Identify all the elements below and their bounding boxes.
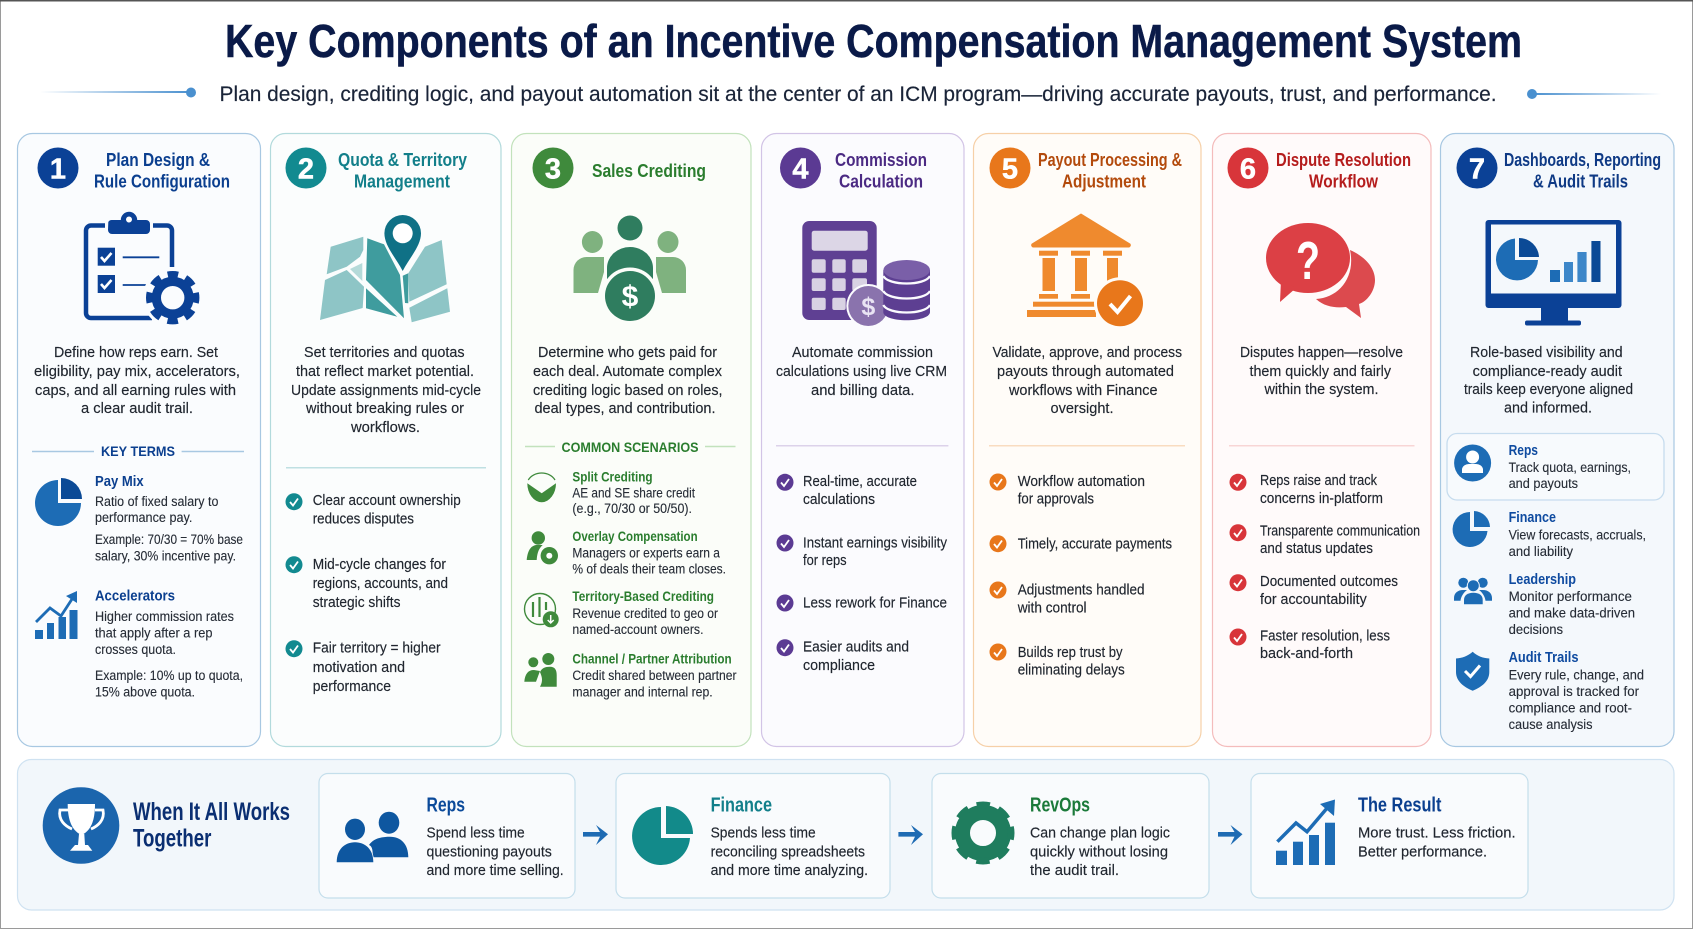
card: revops: the audit trail.: [1030, 862, 1119, 879]
icon: clipboard with gear: [86, 212, 203, 328]
key terms heading: KEY TERMS: [101, 443, 175, 459]
card: finance: and more time analyzing.: [711, 862, 868, 879]
description: Validate, approve, and process: [992, 344, 1182, 361]
description: workflows with Finance: [1008, 382, 1158, 399]
check bullet: [286, 493, 302, 510]
check bullet: [776, 594, 794, 612]
heading: [94, 150, 230, 192]
benefits list: [1230, 472, 1420, 662]
description: [1240, 344, 1403, 398]
icon: calculator with coin and database: [802, 221, 930, 328]
audience: audit trails: Every rule, change, and: [1509, 668, 1644, 683]
audience: audit trails: approval is tracked for: [1509, 684, 1639, 699]
scenario: territory-based crediting: Revenue credited to geo or: [572, 606, 718, 621]
description: within the system.: [1264, 381, 1378, 398]
scenario: channel partner attribution: Credit shared between partner: [572, 668, 737, 683]
card: revops: quickly without losing: [1030, 844, 1168, 861]
scenario: split crediting: Split Crediting: [572, 469, 653, 485]
audience: finance: [1509, 509, 1646, 559]
check bullet: [990, 644, 1006, 660]
scenario: overlay compensation: [572, 528, 726, 577]
common scenarios heading: COMMON SCENARIOS: [562, 439, 698, 455]
benefits list: Builds rep trust by: [1018, 644, 1123, 661]
audience: reps box: and payouts: [1509, 476, 1578, 491]
description: a clear audit trail.: [81, 400, 193, 417]
description: [776, 344, 947, 399]
scenario: channel partner attribution: manager and internal rep.: [572, 685, 713, 700]
panel: dispute resolution: [1212, 134, 1431, 746]
description: and informed.: [1504, 400, 1592, 417]
description: that reflect market potential.: [296, 363, 474, 380]
benefits list: [776, 473, 947, 674]
description: compliance-ready audit: [1473, 363, 1623, 380]
panel: when it all works together: [18, 760, 1674, 910]
number badge 6: 6: [1240, 154, 1256, 186]
scenario: territory-based crediting: named-account owners.: [572, 622, 704, 637]
description: without breaking rules or: [305, 400, 464, 417]
audience: leadership: and make data-driven: [1509, 606, 1635, 621]
description: Set territories and quotas: [304, 344, 464, 361]
scenario: split crediting: (e.g., 70/30 or 50/50).: [572, 501, 692, 516]
benefits list: Faster resolution, less: [1260, 628, 1390, 645]
icon: map with pin: [320, 215, 450, 322]
check bullet: [286, 640, 302, 657]
description: [291, 344, 481, 436]
term: accelerators: [95, 588, 243, 700]
audience: leadership: Leadership: [1509, 571, 1576, 588]
benefits list: Easier audits and: [803, 639, 909, 656]
term: pay mix: Pay Mix: [95, 473, 144, 490]
audience: audit trails: [1509, 649, 1644, 732]
description: crediting logic based on roles,: [533, 382, 722, 399]
benefits list: Transparente communication: [1260, 523, 1420, 540]
term: pay mix: performance pay.: [95, 510, 192, 525]
heading: [835, 150, 927, 192]
panel: sales crediting: [512, 134, 751, 746]
benefits list: strategic shifts: [313, 594, 400, 611]
arrow: [898, 825, 923, 845]
benefits list: Reps raise and track: [1260, 472, 1377, 489]
description: Role-based visibility and: [1470, 344, 1623, 361]
benefits list: [990, 473, 1172, 679]
icon: people with dollar coin: [574, 216, 686, 324]
term: accelerators: Example: 10% up to quota,: [95, 668, 243, 683]
card: revops: Can change plan logic: [1030, 825, 1170, 842]
arrow: [1218, 825, 1242, 845]
term: accelerators: crosses quota.: [95, 642, 176, 657]
icon: split crediting: [527, 473, 556, 502]
benefits list: concerns in-platform: [1260, 490, 1383, 507]
heading: Quota & Territory: [338, 150, 467, 170]
icon: overlay compensation: [527, 531, 558, 564]
benefits list: regions, accounts, and: [313, 575, 448, 592]
heading: Rule Configuration: [94, 172, 230, 192]
icon: audit shield: [1456, 652, 1489, 691]
scenario: channel partner attribution: Channel / Partner Attribution: [572, 651, 732, 667]
icon: result chart: [1276, 800, 1335, 865]
benefits list: Fair territory = higher: [313, 640, 441, 657]
audience: audit trails: compliance and root-: [1509, 701, 1632, 716]
audience: finance: View forecasts, accruals,: [1509, 528, 1646, 543]
benefits list: Instant earnings visibility: [803, 535, 947, 552]
heading: Management: [354, 172, 450, 192]
number badge 1: [38, 148, 78, 188]
scenario: territory-based crediting: Territory-Based Crediting: [572, 588, 714, 604]
check bullet: [990, 535, 1006, 552]
description: [992, 344, 1182, 417]
left subtitle accent: [40, 88, 196, 98]
description: calculations using live CRM: [776, 363, 947, 380]
card: the result: Better performance.: [1358, 844, 1487, 861]
icon: trophy: [43, 787, 119, 864]
description: Automate commission: [792, 344, 933, 361]
audience: audit trails: cause analysis: [1509, 717, 1593, 732]
heading: Workflow: [1309, 172, 1379, 192]
check bullet: [1230, 574, 1246, 591]
card: reps: questioning payouts: [426, 844, 552, 861]
number badge 4: [780, 148, 821, 188]
number badge 3: [532, 148, 574, 188]
number badge 6: [1228, 148, 1268, 188]
icon: channel partner attribution: [524, 653, 557, 687]
term: accelerators: 15% above quota.: [95, 685, 195, 700]
audience: leadership: Monitor performance: [1509, 589, 1632, 604]
icon: leadership group: [1454, 578, 1492, 604]
scenario: channel partner attribution: [572, 651, 737, 700]
benefits list: Documented outcomes: [1260, 573, 1398, 590]
description: caps, and all earning rules with: [35, 382, 236, 399]
audience: reps box: Track quota, earnings,: [1509, 460, 1631, 475]
audience: leadership: decisions: [1509, 622, 1563, 637]
card: revops: RevOps: [1030, 795, 1090, 817]
heading: Adjustment: [1062, 172, 1146, 192]
benefits list: for approvals: [1018, 491, 1094, 508]
card: finance: [616, 774, 890, 898]
right subtitle accent: [1527, 89, 1661, 99]
number badge 2: [286, 148, 326, 188]
icon: reps people: [337, 812, 408, 862]
card: finance: Finance: [711, 795, 772, 817]
check bullet: [1230, 628, 1246, 646]
audience: finance: Finance: [1509, 509, 1556, 526]
audience: audit trails: Audit Trails: [1509, 649, 1578, 666]
benefits list: eliminating delays: [1018, 662, 1125, 679]
number badge 3: 3: [545, 154, 561, 186]
icon: finance pie: [1453, 511, 1490, 547]
description: [34, 344, 240, 417]
number badge 4: 4: [792, 154, 809, 186]
benefits list: Less rework for Finance: [803, 595, 947, 612]
number badge 7: 7: [1469, 154, 1485, 186]
description: and billing data.: [811, 382, 914, 399]
heading: [338, 150, 467, 192]
heading: Calculation: [839, 172, 923, 192]
check bullet: [776, 639, 794, 656]
benefits list: performance: [313, 678, 391, 695]
scenario: overlay compensation: Overlay Compensation: [572, 528, 698, 544]
heading: [1504, 150, 1661, 192]
card: reps: Spend less time: [426, 825, 525, 842]
card: reps: Reps: [426, 795, 465, 817]
benefits list: for accountability: [1260, 591, 1367, 608]
heading: Together: [133, 825, 212, 853]
icon: people with dollar coin: $: [622, 280, 639, 314]
heading: Commission: [835, 150, 927, 170]
benefits list: Timely, accurate payments: [1018, 536, 1172, 553]
term: pay mix: Example: 70/30 = 70% base: [95, 532, 243, 547]
icon: finance pie: [632, 806, 693, 865]
benefits list: back-and-forth: [1260, 645, 1353, 662]
icon: monitor dashboard: [1486, 220, 1622, 326]
description: Disputes happen—resolve: [1240, 344, 1403, 361]
heading: & Audit Trails: [1533, 172, 1628, 192]
icon: calculator with coin and database: $: [861, 293, 875, 321]
heading: When It All Works: [133, 798, 290, 826]
scenario: split crediting: [572, 469, 695, 516]
panel: quota and territory: [270, 134, 501, 746]
card: finance: reconciling spreadsheets: [711, 844, 865, 861]
number badge 7: [1456, 148, 1498, 188]
check bullet: [776, 534, 794, 552]
term: pay mix: salary, 30% incentive pay.: [95, 549, 236, 564]
benefits list: [286, 492, 461, 695]
subtitle: Plan design, crediting logic, and payout automation sit at the center of an ICM program—driving accurate payouts, trust, and performance.: [220, 83, 1496, 106]
card: the result: The Result: [1358, 795, 1442, 817]
heading: Dispute Resolution: [1276, 150, 1411, 170]
description: Update assignments mid-cycle: [291, 382, 481, 399]
icon: accelerators chart: [35, 591, 78, 639]
icon: speech bubbles with question: ?: [1296, 231, 1320, 291]
audience: finance: and liability: [1509, 544, 1573, 559]
benefits list: compliance: [803, 657, 875, 674]
check bullet: [286, 556, 302, 573]
audience: reps box: [1447, 434, 1664, 500]
description: [533, 344, 722, 417]
benefits list: reduces disputes: [313, 511, 414, 528]
card: revops: [932, 774, 1209, 898]
description: payouts through automated: [997, 363, 1174, 380]
check bullet: [990, 582, 1006, 598]
card: the result: [1251, 774, 1528, 898]
description: them quickly and fairly: [1250, 363, 1391, 380]
icon: revops gear: [955, 805, 1011, 861]
description: workflows.: [350, 419, 420, 436]
number badge 5: [990, 148, 1030, 188]
icon: bank with check: [1027, 214, 1146, 329]
description: eligibility, pay mix, accelerators,: [34, 363, 240, 380]
panel: payout processing: [974, 134, 1201, 746]
description: Define how reps earn. Set: [54, 344, 219, 361]
heading: Plan Design &: [106, 150, 210, 170]
card: reps: [319, 774, 575, 898]
benefits list: Adjustments handled: [1018, 582, 1145, 599]
check bullet: [990, 474, 1006, 490]
description: [1464, 344, 1633, 417]
icon: rep avatar: [1454, 444, 1491, 482]
description: oversight.: [1050, 400, 1114, 417]
benefits list: calculations: [803, 491, 875, 508]
panel: commission calculation: [762, 134, 964, 746]
scenario: overlay compensation: % of deals their team closes.: [572, 562, 726, 577]
scenario: split crediting: AE and SE share credit: [572, 486, 695, 501]
term: accelerators: Higher commission rates: [95, 609, 234, 624]
term: pay mix: [95, 473, 243, 564]
scenario: overlay compensation: Managers or experts earn a: [572, 546, 720, 561]
icon: territory-based crediting: [524, 594, 559, 627]
description: deal types, and contribution.: [534, 400, 716, 417]
term: pay mix: Ratio of fixed salary to: [95, 494, 218, 509]
card: the result: More trust. Less friction.: [1358, 825, 1516, 842]
icon: pay mix pie: [35, 478, 82, 526]
card: finance: Spends less time: [711, 825, 816, 842]
benefits list: for reps: [803, 552, 847, 569]
scenario: territory-based crediting: [572, 588, 718, 637]
number badge 2: 2: [298, 154, 314, 186]
number badge 1: 1: [50, 154, 66, 186]
audience: reps box: Reps: [1509, 442, 1538, 459]
heading: Payout Processing &: [1038, 150, 1182, 170]
benefits list: Clear account ownership: [313, 492, 461, 509]
icon: speech bubbles with question: [1266, 223, 1375, 318]
check bullet: [1230, 524, 1246, 541]
term: accelerators: that apply after a rep: [95, 626, 212, 641]
card: reps: and more time selling.: [426, 862, 564, 879]
benefits list: Real-time, accurate: [803, 473, 917, 490]
benefits list: Mid-cycle changes for: [313, 556, 446, 573]
panel: plan design: [18, 134, 260, 746]
check bullet: [1230, 474, 1246, 491]
number badge 5: 5: [1002, 154, 1018, 186]
audience: leadership: [1509, 571, 1635, 637]
benefits list: and status updates: [1260, 540, 1373, 557]
heading: [1276, 150, 1411, 192]
term: accelerators: Accelerators: [95, 588, 175, 605]
panel: dashboards and audit trails: [1440, 134, 1674, 746]
arrow: [583, 825, 608, 845]
benefits list: Workflow automation: [1018, 473, 1145, 490]
description: trails keep everyone aligned: [1464, 381, 1633, 398]
heading: [1038, 150, 1182, 192]
description: Determine who gets paid for: [538, 344, 717, 361]
benefits list: motivation and: [313, 659, 405, 676]
heading: Sales Crediting: [592, 161, 706, 181]
heading: [133, 798, 290, 853]
description: each deal. Automate complex: [533, 363, 722, 380]
check bullet: [776, 474, 794, 491]
benefits list: with control: [1017, 600, 1087, 617]
